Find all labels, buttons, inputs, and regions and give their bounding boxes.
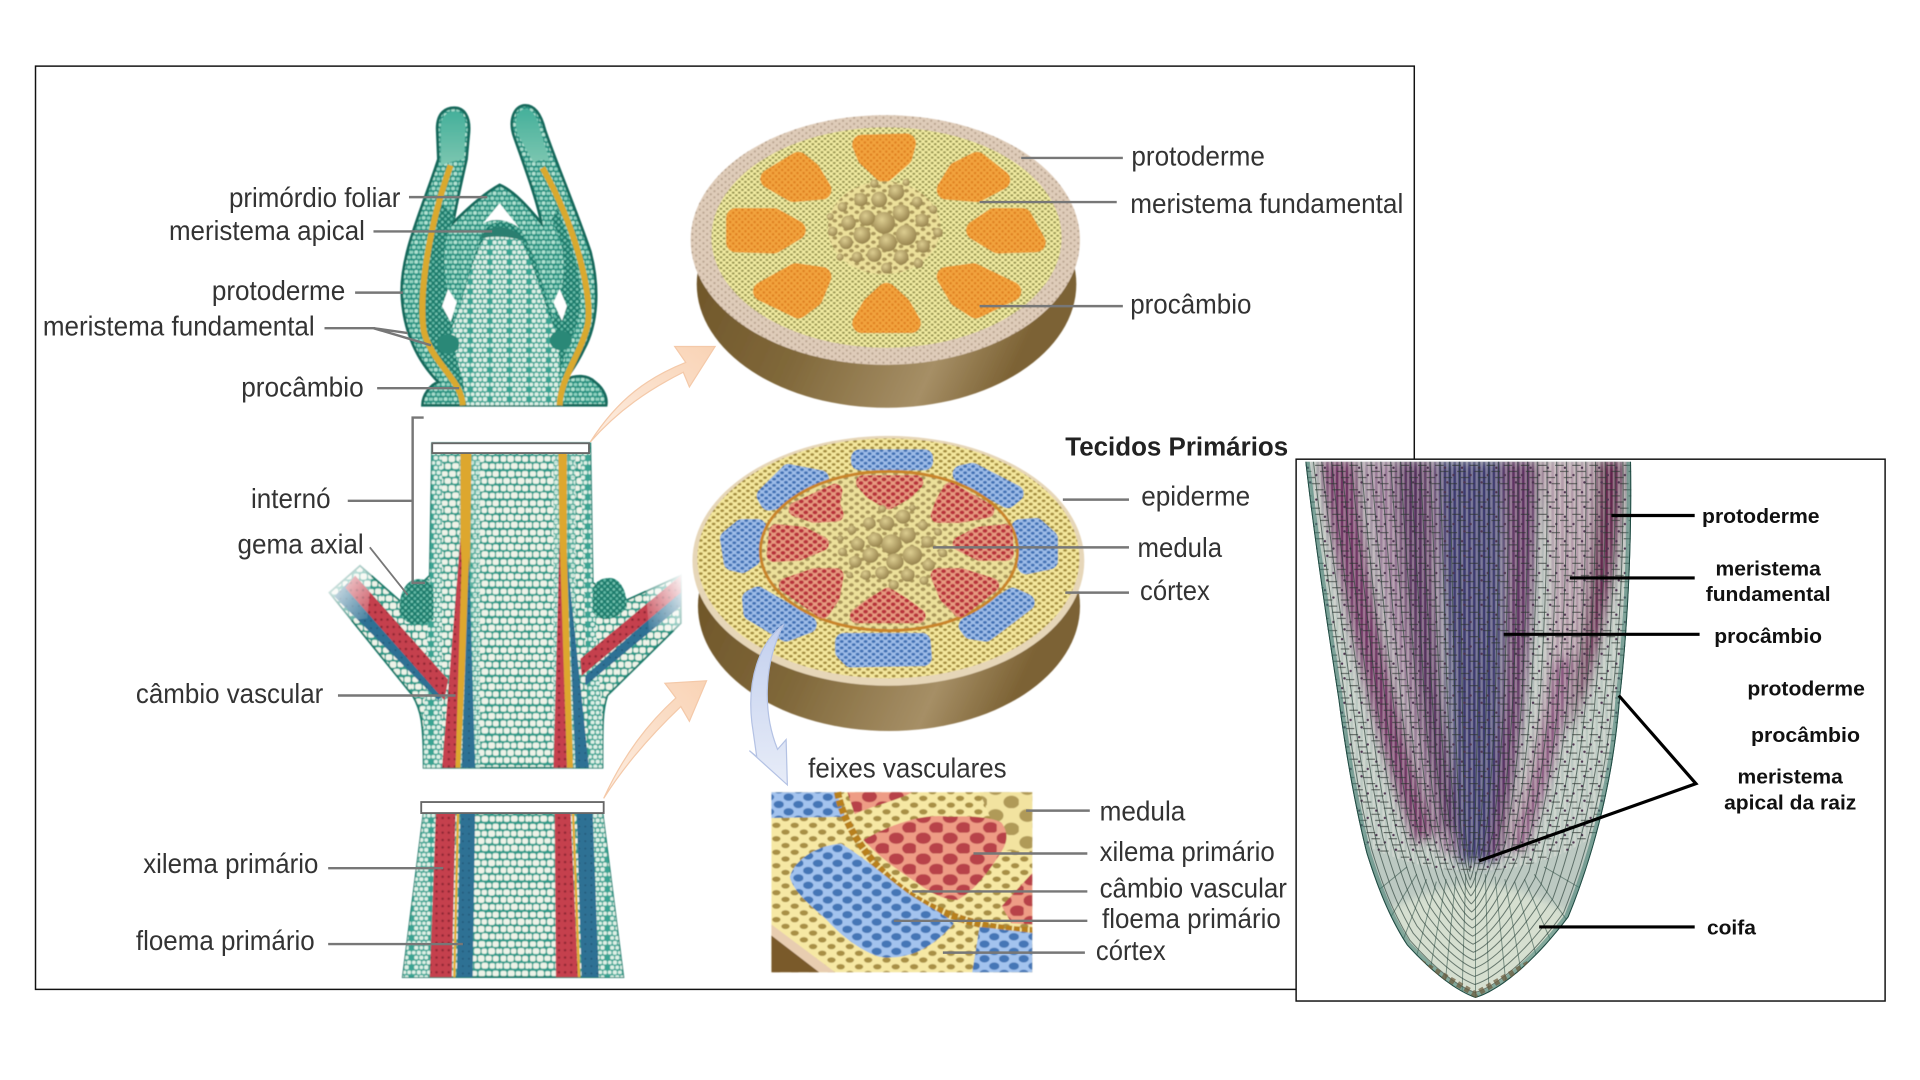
label: floema primário: floema primário [136,925,315,956]
axillary buds [399,579,433,625]
pale cap zone [1390,884,1567,1004]
blue phloem blocks [729,458,1049,659]
medulla cells [827,179,943,274]
disc: procambium stage [691,115,1080,408]
cell textures [1298,460,1641,871]
label: córtex (inset): córtex [1096,935,1166,966]
label: procâmbio (root): procâmbio [1714,626,1822,648]
label: meristema fundamental (root): fundamental [1706,584,1831,606]
label: meristema fundamental [43,311,431,345]
label: xilema primário (inset): xilema primário [1100,836,1275,867]
xylem wedge [863,816,1007,900]
section marker upper [432,443,589,453]
main vascular strands [442,453,589,768]
arrow: zoom to vascular bundle [749,624,787,785]
label: câmbio vascular (inset): câmbio vascular [1100,873,1287,904]
arrow: lower section to disc [604,681,707,798]
phloem lower-right [972,927,1032,972]
heading: Tecidos Primários: Tecidos Primários [1065,434,1288,462]
label: meristema apical da raiz: meristema [1738,767,1844,789]
purple tissue zones [1320,460,1624,862]
label: câmbio vascular: câmbio vascular [136,678,323,709]
lower stem segment [403,813,623,977]
branch vascular strands [334,576,681,700]
label: procâmbio: procâmbio [241,372,364,403]
procambium strands [422,165,463,405]
epidermis band [771,924,835,972]
leaf primordium tips [441,109,550,165]
radial cell walls of cap [1374,867,1580,998]
section marker lower [421,802,604,813]
xylem right [1002,873,1032,924]
inset: vascular bundle detail [771,792,1032,972]
panel: root tip [1296,459,1885,1005]
heading: feixes vasculares: feixes vasculares [808,753,1007,784]
label: meristema fundamental (root): meristema [1716,559,1822,581]
label: protoderme (root): protoderme [1702,506,1820,528]
label: primórdio foliar: primórdio foliar [229,182,400,213]
label: coifa: coifa [1707,917,1757,939]
label: xilema primário: xilema primário [143,848,318,879]
label: meristema apical da raiz: apical da raiz [1724,792,1856,814]
medulla cells [837,504,947,590]
label: floema primário (inset): floema primário [1102,903,1281,934]
cambium arc [838,792,1032,931]
outer dark cell band [1305,462,1631,998]
label: protoderme (disc): protoderme [1131,140,1265,171]
label: internó with bracket [251,418,425,583]
red xylem wedges [774,482,1007,616]
nested cell files [1314,461,1623,993]
procambium wedges [736,143,1036,323]
arrow: upper section to disc [590,347,715,442]
label: epiderme: epiderme [1141,481,1250,512]
cambium ring [760,471,1018,631]
label: meristema apical: meristema apical [169,215,365,246]
label: meristema fundamental (disc): meristema fundamental [1130,188,1403,219]
label: protoderme (apical): protoderme [1747,679,1865,701]
label: medula (inset): medula [1100,795,1186,826]
label: gema axial: gema axial [238,528,364,559]
label: meristema fundamental: meristema fundamental [43,311,315,342]
panel: stem primary tissues [36,66,1414,989]
phloem large [790,844,954,957]
shoot apex illustration [402,105,606,405]
label: protoderme: protoderme [212,275,345,306]
label: gema axial [238,528,408,595]
root tip micrograph [1298,460,1641,1005]
inner primordia gaps [482,203,519,228]
label: procâmbio (disc): procâmbio [1130,288,1251,319]
label: meristema fundamental (root) [1570,559,1831,606]
label: internó with bracket: internó [251,483,331,514]
label: procâmbio (apical): procâmbio [1751,725,1860,747]
internode with axillary buds [321,443,686,768]
phloem top-left [771,792,845,818]
label: meristema apical da raiz [1479,696,1856,861]
xylem top [847,792,912,814]
medulla corner [980,792,1032,851]
outer small-celled cortex [424,453,602,768]
label: córtex: córtex [1140,575,1210,606]
disc: primary tissues stage [692,436,1084,731]
label: medula: medula [1138,532,1223,563]
